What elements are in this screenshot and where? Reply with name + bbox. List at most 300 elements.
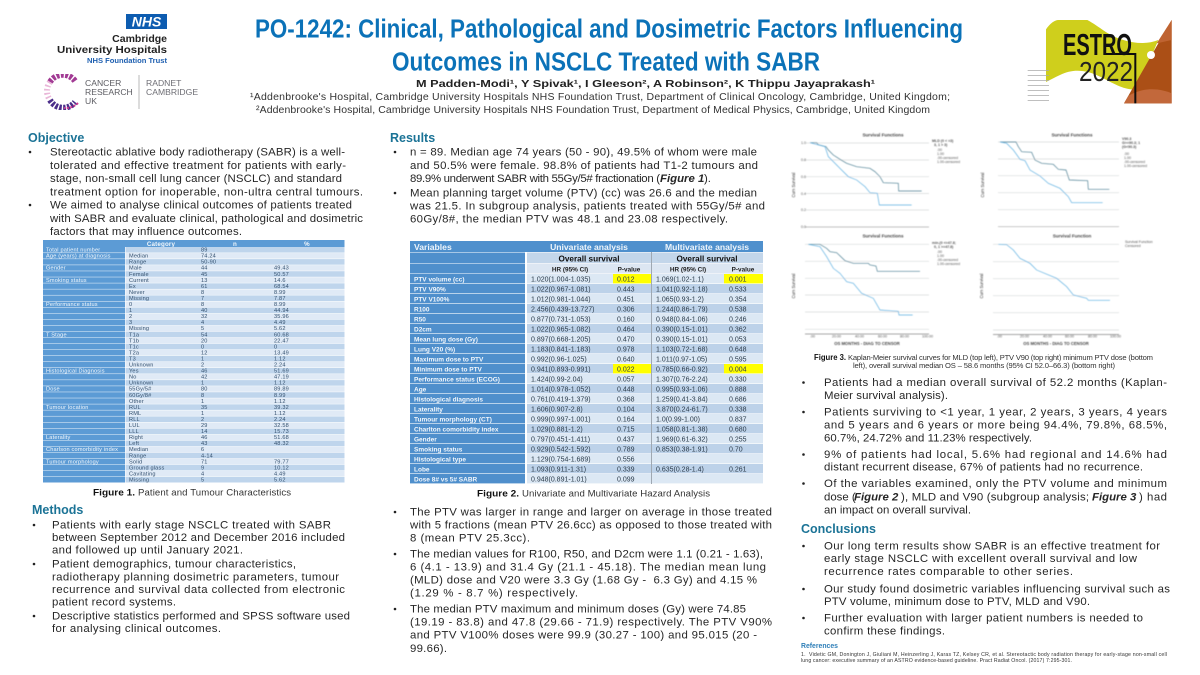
table: univariate and multivariate hazard analysis: 0.837: [729, 416, 747, 423]
chart: overall survival (bottom right): Censored: [1125, 244, 1141, 248]
chart: Kaplan-Meier MLD (top left): .00-censored: [937, 156, 958, 160]
text block: methods bullets: radiotherapy planning dosimetric parameters, tumour: [52, 572, 339, 584]
text block: survival findings bullets: Figure 3: [1092, 492, 1137, 504]
text block: conclusions bullets: early stage NSCLC with excellent overall survival and low: [824, 553, 1138, 565]
text block: survival findings bullets: an impact on overall survival.: [824, 504, 971, 516]
chart: Kaplan-Meier MLD (top left): 1.00: [937, 152, 944, 156]
chart: Kaplan-Meier MLD (top left): [791, 132, 960, 229]
table: patient and tumour characteristics: 7.87: [274, 296, 286, 302]
text block: objective bullets: treatment option for inoperable, non-ultra central tumours.: [50, 186, 363, 198]
table: patient and tumour characteristics: 43: [201, 441, 208, 447]
logo: ESTRO 2022: [1028, 20, 1172, 103]
text block: objective bullets: tolerated and effective treatment for patients with early-: [50, 160, 346, 172]
chart: overall survival (bottom right): 100.00: [1110, 334, 1121, 338]
caption: Figure 1: Figure 1.: [93, 488, 135, 498]
table: patient and tumour characteristics: Age (years) at diagnosis: [46, 254, 111, 260]
table: patient and tumour characteristics: Histological Diagnosis: [46, 369, 105, 375]
chart: overall survival (bottom right): 40.00: [1043, 334, 1052, 338]
table: univariate and multivariate hazard analysis: 0.362: [729, 326, 747, 333]
table: univariate and multivariate hazard analysis: 0.246: [729, 316, 747, 323]
text block: survival findings bullets: ) had: [1139, 492, 1167, 504]
table: patient and tumour characteristics: 54: [201, 332, 208, 338]
text block: results summary bullets: [394, 146, 765, 226]
table: patient and tumour characteristics: 6: [201, 447, 204, 453]
table: univariate and multivariate hazard analysis: 0.640: [617, 356, 635, 363]
chart: Kaplan-Meier minimum PTV dose (bottom left): .00: [810, 334, 815, 338]
table: univariate and multivariate hazard analysis: 3.870(0.24-61.7): [656, 406, 708, 413]
title: Outcomes in NSCLC Treated with SABR: [392, 48, 820, 76]
table: patient and tumour characteristics: Other: [129, 399, 144, 405]
table: univariate and multivariate hazard analysis: 1.011(0.97-1.05): [656, 356, 707, 363]
logo: ESTRO 2022: ESTRO: [1063, 27, 1132, 62]
table: univariate and multivariate hazard analysis: 1.424(0.99-2.04): [531, 376, 583, 383]
panel: conclusions: [801, 522, 1170, 638]
logo: Cancer Research UK RadNet Cambridge: CAMBRIDGE: [146, 87, 198, 97]
chart: Kaplan-Meier PTV V90 (top right): Cum Survival: [980, 172, 985, 197]
text block: objective bullets: Stereotactic ablative body radiotherapy (SABR) is a well-: [50, 146, 345, 158]
table: patient and tumour characteristics: Current: [129, 278, 149, 284]
caption: Figure 1: Patient and Tumour Characteristics: [138, 488, 291, 498]
references: [801, 643, 1167, 664]
chart: Kaplan-Meier PTV V90 (top right): 1.00-censored: [1124, 164, 1147, 168]
table: univariate and multivariate hazard analysis: Age: [414, 386, 427, 393]
chart: Kaplan-Meier minimum PTV dose (bottom left): .00-censored: [937, 258, 958, 262]
table: patient and tumour characteristics: Total patient number: [46, 248, 100, 254]
table: univariate and multivariate hazard analysis: Laterality: [414, 406, 443, 413]
table: patient and tumour characteristics: Charlson comorbidity index: [46, 447, 118, 453]
table: patient and tumour characteristics: 32: [201, 314, 208, 320]
table: univariate and multivariate hazard analysis: Overall survival: [676, 254, 738, 264]
table: univariate and multivariate hazard analysis: 0.160: [617, 316, 635, 323]
table: patient and tumour characteristics: 1: [201, 381, 204, 387]
table: univariate and multivariate hazard analysis: P-value: [618, 266, 641, 273]
table: univariate and multivariate hazard analysis: 1.012(0.981-1.044): [531, 296, 591, 303]
table: univariate and multivariate hazard analysis: Variables: [414, 242, 452, 252]
table: patient and tumour characteristics: 0: [201, 344, 204, 350]
chart: overall survival (bottom right): 60.00: [1065, 334, 1074, 338]
table: univariate and multivariate hazard analysis: 0.948(0.84-1.06): [656, 316, 708, 323]
table: univariate and multivariate hazard analysis: 1.041(0.92-1.18): [656, 286, 708, 293]
table: patient and tumour characteristics: 60Gy/8#: [129, 393, 152, 399]
chart: Kaplan-Meier PTV V90 (top right): [980, 132, 1147, 227]
chart: Kaplan-Meier PTV V90 (top right): V90.3: [1122, 137, 1131, 141]
chart: Kaplan-Meier PTV V90 (top right): Survival Functions: [1051, 132, 1093, 138]
table: patient and tumour characteristics: LLL: [129, 429, 139, 435]
table: patient and tumour characteristics: Missing: [129, 296, 149, 302]
table: univariate and multivariate hazard analysis: 0.533: [729, 286, 747, 293]
chart: Kaplan-Meier MLD (top left): 1.00-censored: [937, 160, 960, 164]
chart: Kaplan-Meier PTV V90 (top right): G>=90.3; 1: [1122, 141, 1140, 145]
table: univariate and multivariate hazard analysis: 1.244(0.86-1.79): [656, 306, 708, 313]
table: univariate and multivariate hazard analysis: 1.058(0.81-1.38): [656, 426, 708, 433]
table: patient and tumour characteristics: T1c: [129, 344, 139, 350]
text block: results detail bullets: with 5 fractions (mean PTV 26.6cc) as opposed to those treated with: [409, 520, 772, 532]
table: univariate and multivariate hazard analysis: 1.014(0.978-1.052): [531, 386, 591, 393]
text block: results detail bullets: (1.29 % - 8.7 %) respectively.: [410, 588, 578, 600]
logo: Cancer Research UK RadNet Cambridge: [47, 75, 198, 109]
table: univariate and multivariate hazard analysis: 1.969(0.61-6.32): [656, 436, 708, 443]
table: patient and tumour characteristics: 4.49: [274, 471, 286, 477]
chart: Kaplan-Meier minimum PTV dose (bottom left): 60.00: [878, 334, 887, 338]
table: patient and tumour characteristics: Never: [129, 290, 145, 296]
text block: methods bullets: recurrence and survival data collected from electronic: [52, 584, 345, 596]
table: univariate and multivariate hazard analysis: Tumour morphology (CT): [414, 416, 492, 423]
table: patient and tumour characteristics: 44: [201, 266, 208, 272]
table: patient and tumour characteristics: 61: [201, 284, 208, 290]
table: patient and tumour characteristics: T1b: [129, 338, 139, 344]
table: patient and tumour characteristics: 50-90: [201, 260, 216, 266]
table: univariate and multivariate hazard analysis: 0.330: [729, 376, 747, 383]
caption: Figure 2: Figure 2.: [477, 488, 519, 500]
table: univariate and multivariate hazard analysis: 0.929(0.542-1.592): [531, 446, 591, 453]
table: patient and tumour characteristics: RUL: [129, 405, 141, 411]
table: univariate and multivariate hazard analysis: R50: [414, 316, 426, 323]
table: patient and tumour characteristics: 8.99: [274, 302, 286, 308]
table: univariate and multivariate hazard analysis: 1.022(0.967-1.081): [531, 286, 591, 293]
table: univariate and multivariate hazard analysis: 0.897(0.668-1.205): [531, 336, 591, 343]
table: univariate and multivariate hazard analysis: 0.948(0.891-1.01): [531, 476, 587, 483]
table: patient and tumour characteristics: %: [304, 241, 310, 248]
chart: Kaplan-Meier PTV V90 (top right): 1.00: [1124, 156, 1131, 160]
table: patient and tumour characteristics: Performance status: [46, 302, 98, 308]
table: univariate and multivariate hazard analysis: 0.390(0.15-1.01): [656, 326, 708, 333]
table: univariate and multivariate hazard analysis: 0.099: [617, 476, 635, 483]
text block: results summary bullets: Figure 1: [660, 173, 704, 185]
table: patient and tumour characteristics: Unknown: [129, 381, 154, 387]
affiliations: [250, 91, 950, 116]
table: patient and tumour characteristics: 1.12: [274, 399, 286, 405]
table: patient and tumour characteristics: 50.57: [274, 272, 289, 278]
chart: Kaplan-Meier minimum PTV dose (bottom left): 40.00: [855, 334, 864, 338]
table: patient and tumour characteristics: [43, 240, 344, 484]
table: patient and tumour characteristics: n: [233, 241, 237, 248]
table: univariate and multivariate hazard analysis: 0.70: [729, 446, 743, 453]
table: patient and tumour characteristics: Unknown: [129, 363, 154, 369]
text block: results detail bullets: [394, 506, 772, 655]
table: univariate and multivariate hazard analysis: Charlton comorbidity index: [414, 426, 499, 433]
table: patient and tumour characteristics: Tumour morphology: [46, 459, 99, 465]
text block: objective bullets: We aimed to analyse clinical outcomes of patients treated: [50, 200, 352, 212]
table: univariate and multivariate hazard analysis: R100: [414, 306, 430, 313]
table: univariate and multivariate hazard analysis: 1.069(1.02-1.1): [656, 276, 704, 283]
table: univariate and multivariate hazard analysis: PTV volume (cc): [414, 276, 465, 283]
chart: Kaplan-Meier minimum PTV dose (bottom left): 1.00-censored: [937, 262, 960, 266]
table: patient and tumour characteristics: 4: [201, 320, 204, 326]
table: patient and tumour characteristics: Range: [129, 453, 146, 459]
table: univariate and multivariate hazard analysis: Gender: [414, 436, 437, 443]
table: univariate and multivariate hazard analysis: 0.443: [617, 286, 635, 293]
table: patient and tumour characteristics: 2.24: [274, 363, 286, 369]
text block: survival findings bullets: ), MLD and V90 (subgroup analysis;: [901, 492, 1089, 504]
chart: Kaplan-Meier MLD (top left): Survival Functions: [862, 132, 904, 138]
table: univariate and multivariate hazard analysis: 0.797(0.451-1.411): [531, 436, 590, 443]
table: patient and tumour characteristics: T1a: [129, 332, 140, 338]
logo: NHS Cambridge University Hospitals: Cambridge: [112, 33, 167, 45]
table: univariate and multivariate hazard analysis: 0.978: [617, 346, 635, 353]
table: univariate and multivariate hazard analysis: 0.595: [729, 356, 747, 363]
chart: overall survival (bottom right): .00: [997, 334, 1002, 338]
table: patient and tumour characteristics: Ex: [129, 284, 136, 290]
table: univariate and multivariate hazard analysis: Multivariate analysis: [665, 242, 749, 252]
table: patient and tumour characteristics: 89: [201, 248, 208, 254]
table: patient and tumour characteristics: Median: [129, 254, 148, 260]
table: univariate and multivariate hazard analysis: 0.368: [617, 396, 635, 403]
table: univariate and multivariate hazard analysis: Smoking status: [414, 446, 463, 453]
table: univariate and multivariate hazard analysis: 0.686: [729, 396, 747, 403]
chart: Kaplan-Meier minimum PTV dose (bottom left): [791, 234, 960, 346]
table: patient and tumour characteristics: 35: [201, 405, 208, 411]
table: patient and tumour characteristics: Right: [129, 435, 143, 441]
chart: Kaplan-Meier PTV V90 (top right): .00: [1124, 152, 1129, 156]
table: patient and tumour characteristics: 44.94: [274, 308, 289, 314]
table: patient and tumour characteristics: Range: [129, 260, 146, 266]
table: patient and tumour characteristics: 15.73: [274, 429, 289, 435]
text block: survival findings bullets: distant recurrent disease, 67% of patients had no recurrence.: [824, 462, 1143, 474]
text block: results detail bullets: (MLD) dose and V20 were 3.3 Gy (1.68 Gy - 6.3 Gy) and 4.15 %: [410, 574, 757, 586]
text block: methods bullets: Patient demographics, tumour characteristics,: [52, 558, 296, 570]
table: patient and tumour characteristics: 46: [201, 435, 208, 441]
table: patient and tumour characteristics: 5.62: [274, 477, 286, 483]
table: patient and tumour characteristics: No: [129, 375, 137, 381]
table: univariate and multivariate hazard analysis: 0.941(0.893-0.991): [531, 366, 591, 373]
table: patient and tumour characteristics: 7: [201, 296, 204, 302]
caption: Figure 2: Univariate and Multivariate Hazard Analysis: [522, 488, 710, 500]
table: univariate and multivariate hazard analysis: Histological diagnosis: [414, 396, 483, 403]
table: univariate and multivariate hazard analysis: 0.437: [617, 436, 635, 443]
table: patient and tumour characteristics: 1: [201, 356, 204, 362]
chart: overall survival (bottom right): 80.00: [1088, 334, 1097, 338]
panel: objective: [28, 131, 363, 238]
table: patient and tumour characteristics: 46: [201, 369, 208, 375]
chart: Kaplan-Meier MLD (top left): 0.0: [801, 225, 806, 229]
chart: overall survival (bottom right): Survival Function: [1053, 234, 1091, 238]
text block: objective bullets: [29, 146, 363, 238]
table: patient and tumour characteristics: 14.6: [274, 278, 286, 284]
logo: NHS Cambridge University Hospitals: University Hospitals: [57, 44, 167, 56]
title: PO-1242: Clinical, Pathological and Dosimetric Factors Influencing: [255, 16, 963, 44]
table: patient and tumour characteristics: 40: [201, 308, 208, 314]
table: univariate and multivariate hazard analysis: 0.448: [617, 386, 635, 393]
table: univariate and multivariate hazard analysis: 0.648: [729, 346, 747, 353]
chart: Kaplan-Meier minimum PTV dose (bottom left): 1.00: [937, 254, 944, 258]
text block: survival findings bullets: Patients surviving to <1 year, 1 year, 2 years, 3 years, 4 years: [824, 407, 1167, 419]
text block: conclusions bullets: recurrence rates comparable to other series.: [824, 566, 1073, 578]
table: univariate and multivariate hazard analysis: 0.053: [729, 336, 747, 343]
text block: methods bullets: and followed up until January 2021.: [52, 544, 243, 556]
table: patient and tumour characteristics: RLL: [129, 417, 140, 423]
caption: Figure 3: Figure 3.: [814, 353, 846, 362]
table: univariate and multivariate hazard analysis: 0.999(0.997-1.001): [531, 416, 591, 423]
logo: Cancer Research UK RadNet Cambridge: RESEARCH: [85, 87, 133, 97]
table: patient and tumour characteristics: Ground glass: [129, 465, 164, 471]
table: univariate and multivariate hazard analysis: 1.065(0.93-1.2): [656, 296, 704, 303]
affiliations: ¹Addenbrooke's Hospital, Cambridge University Hospitals NHS Foundation Trust, Department of Clinical Oncology, Cambridge, United Kingdom;: [250, 91, 950, 103]
table: patient and tumour characteristics: 29: [201, 423, 208, 429]
text block: survival findings bullets: Patients had a median overall survival of 52.2 months (Kaplan-: [824, 377, 1167, 389]
text block: survival findings bullets: and 5 years and 6 years or more being 94.4%, 79.8%, 68.5%,: [824, 420, 1167, 432]
table: univariate and multivariate hazard analysis: 1.022(0.965-1.082): [531, 326, 591, 333]
table: univariate and multivariate hazard analysis: 1.020(1.004-1.035): [531, 276, 591, 283]
table: univariate and multivariate hazard analysis: HR (95% CI): [670, 266, 706, 273]
table: univariate and multivariate hazard analysis: 0.853(0.38-1.91): [656, 446, 708, 453]
table: univariate and multivariate hazard analysis: 0.470: [617, 336, 635, 343]
table: patient and tumour characteristics: Category: [147, 241, 176, 248]
table: patient and tumour characteristics: 5: [201, 477, 204, 483]
table: patient and tumour characteristics: 35.96: [274, 314, 289, 320]
table: univariate and multivariate hazard analysis: 0.104: [617, 406, 635, 413]
table: univariate and multivariate hazard analysis: 0.464: [617, 326, 635, 333]
chart: Kaplan-Meier PTV V90 (top right): (G<90.3): [1122, 145, 1137, 149]
table: patient and tumour characteristics: 47.19: [274, 375, 289, 381]
chart: Kaplan-Meier minimum PTV dose (bottom left): 0, 1 >=47.8): [934, 245, 954, 249]
logo: Cancer Research UK RadNet Cambridge: UK: [85, 96, 97, 106]
table: patient and tumour characteristics: 42: [201, 375, 208, 381]
text block: results detail bullets: The median values for R100, R50, and D2cm were 1.1 (0.21 - 1.63),: [410, 548, 763, 560]
table: patient and tumour characteristics: Smoking status: [46, 278, 87, 284]
table: univariate and multivariate hazard analysis: 1.606(0.907-2.8): [531, 406, 583, 413]
table: patient and tumour characteristics: 10.12: [274, 465, 289, 471]
table: patient and tumour characteristics: Left: [129, 441, 139, 447]
table: univariate and multivariate hazard analysis: D2cm: [414, 326, 432, 333]
table: univariate and multivariate hazard analysis: 0.635(0.28-1.4): [656, 466, 704, 473]
text block: conclusions bullets: [802, 540, 1170, 638]
table: patient and tumour characteristics: 8.99: [274, 393, 286, 399]
heading: Conclusions: Conclusions: [801, 522, 876, 536]
text block: survival findings bullets: 9% of patients had local, 5.6% had regional and 14.6% had: [824, 449, 1167, 461]
logo: NHS Cambridge University Hospitals: NHS: [132, 14, 162, 30]
table: patient and tumour characteristics: 8: [201, 393, 204, 399]
table: patient and tumour characteristics: 5.62: [274, 326, 286, 332]
table: patient and tumour characteristics: 55Gy/5#: [129, 387, 152, 393]
table: patient and tumour characteristics: 79.77: [274, 459, 289, 465]
table: univariate and multivariate hazard analysis: Dose 8# vs 5# SABR: [414, 476, 478, 483]
table: univariate and multivariate hazard analysis: 0.057: [617, 376, 635, 383]
table: univariate and multivariate hazard analysis: P-value: [732, 266, 755, 273]
chart: Kaplan-Meier minimum PTV dose (bottom left): .00: [937, 250, 942, 254]
table: patient and tumour characteristics: 48.32: [274, 441, 289, 447]
text block: results detail bullets: 6 (4.1 - 13.9) and 31.4 Gy (21.1 - 45.18). The median mean lung: [410, 562, 766, 574]
heading: Methods: Methods: [32, 503, 83, 517]
chart: Kaplan-Meier minimum PTV dose (bottom left): min.(0 <=47.8;: [932, 241, 956, 245]
table: patient and tumour characteristics: 12: [201, 350, 208, 356]
table: patient and tumour characteristics: Laterality: [46, 435, 71, 441]
chart: Kaplan-Meier minimum PTV dose (bottom left): 100.00: [922, 334, 933, 338]
text block: results summary bullets: was 21.5. In subgroup analysis, patients treated with 55Gy/5# and: [409, 200, 765, 212]
chart: Kaplan-Meier minimum PTV dose (bottom left): 80.00: [900, 334, 909, 338]
table: patient and tumour characteristics: 14: [201, 429, 208, 435]
chart: overall survival (bottom right): 20.00: [1020, 334, 1029, 338]
table: patient and tumour characteristics: 8.99: [274, 290, 286, 296]
caption: Figure 3: [814, 353, 1153, 370]
table: univariate and multivariate hazard analysis: 0.785(0.66-0.92): [656, 366, 708, 373]
table: univariate and multivariate hazard analysis: [410, 241, 763, 484]
chart: Kaplan-Meier MLD (top left): 0.8: [801, 158, 806, 162]
table: patient and tumour characteristics: 13.49: [274, 350, 289, 356]
table: univariate and multivariate hazard analysis: Maximum dose to PTV: [414, 356, 484, 363]
text block: survival findings bullets: dose (: [824, 492, 856, 504]
table: patient and tumour characteristics: 32.58: [274, 423, 289, 429]
logo: NHS Cambridge University Hospitals: [57, 14, 168, 65]
text block: methods bullets: between September 2012 and December 2016 included: [52, 532, 345, 544]
table: patient and tumour characteristics: 80: [201, 387, 208, 393]
text block: results detail bullets: (19.19 - 83.8) and 47.8 (29.66 - 71.9) respectively. The PTV V90%: [410, 616, 772, 628]
table: patient and tumour characteristics: 13: [201, 278, 208, 284]
table: patient and tumour characteristics: 60.68: [274, 332, 289, 338]
text block: survival findings bullets: [802, 377, 1167, 516]
table: univariate and multivariate hazard analysis: 1.0(0.99-1.00): [656, 416, 700, 423]
caption: Figure 3: Kaplan-Meier survival curves for MLD (top left), PTV V90 (top right) minimum PTV dose (bottom: [848, 353, 1153, 362]
table: univariate and multivariate hazard analysis: 0.022: [617, 366, 635, 373]
table: univariate and multivariate hazard analysis: Overall survival: [558, 254, 620, 264]
table: univariate and multivariate hazard analysis: 0.680: [729, 426, 747, 433]
table: patient and tumour characteristics: 20: [201, 338, 208, 344]
table: patient and tumour characteristics: 1.12: [274, 411, 286, 417]
table: patient and tumour characteristics: 4.49: [274, 320, 286, 326]
chart: overall survival (bottom right): Cum Survival: [979, 273, 984, 298]
table: univariate and multivariate hazard analysis: 1.029(0.881-1.2): [531, 426, 583, 433]
table: patient and tumour characteristics: 0: [129, 302, 132, 308]
panel: results: [390, 131, 765, 226]
table: patient and tumour characteristics: 2: [201, 417, 204, 423]
table: univariate and multivariate hazard analysis: 0.451: [617, 296, 635, 303]
chart: Kaplan-Meier minimum PTV dose (bottom left): Cum Survival: [791, 273, 796, 298]
table: patient and tumour characteristics: 49.43: [274, 266, 289, 272]
table: patient and tumour characteristics: 8: [201, 302, 204, 308]
affiliations: ²Addenbrooke's Hospital, Cambridge University Hospitals NHS Foundation Trust, Department of Medical Physics, Cambridge, United Kingdom: [256, 104, 930, 116]
text block: results detail bullets: 8 (mean PTV 25.3cc).: [410, 532, 530, 544]
text block: survival findings bullets: Figure 2: [854, 492, 899, 504]
table: patient and tumour characteristics: Gender: [46, 266, 66, 272]
text block: results detail bullets: and PTV V100% doses were 99.9 (30.27 - 100) and 95.015 (20 -: [410, 630, 757, 642]
table: univariate and multivariate hazard analysis: PTV V100%: [414, 296, 450, 303]
table: univariate and multivariate hazard analysis: 0.255: [729, 436, 747, 443]
table: univariate and multivariate hazard analysis: 0.338: [729, 406, 747, 413]
table: univariate and multivariate hazard analysis: Lobe: [414, 466, 430, 473]
text block: methods bullets: Patients with early stage NSCLC treated with SABR: [52, 520, 331, 532]
references: References: [801, 643, 838, 650]
table: patient and tumour characteristics: T3: [129, 356, 136, 362]
table: patient and tumour characteristics: 4-14: [201, 453, 213, 459]
table: patient and tumour characteristics: 71: [201, 459, 208, 465]
table: univariate and multivariate hazard analysis: 1.093(0.911-1.31): [531, 466, 586, 473]
table: univariate and multivariate hazard analysis: Lung V20 (%): [414, 346, 455, 353]
text block: conclusions bullets: Our study found dosimetric variables influencing survival such as: [824, 584, 1170, 596]
table: univariate and multivariate hazard analysis: 0.390(0.15-1.01): [656, 336, 708, 343]
references: lung cancer: executive summary of an ASTRO evidence-based guideline. Pract Radiat Oncol. (2017) 7:295-301.: [801, 658, 1072, 664]
text block: results summary bullets: 89.9% underwent SABR with 55Gy/5# fractionation (: [410, 173, 660, 185]
table: patient and tumour characteristics: 9: [201, 465, 204, 471]
text block: methods bullets: patient record systems.: [52, 596, 176, 608]
table: patient and tumour characteristics: Yes: [129, 369, 139, 375]
text block: conclusions bullets: confirm these findings.: [824, 626, 945, 638]
table: univariate and multivariate hazard analysis: 0.995(0.93-1.06): [656, 386, 708, 393]
table: patient and tumour characteristics: Missing: [129, 326, 149, 332]
text block: methods bullets: for analysing clinical outcomes.: [52, 623, 221, 635]
table: patient and tumour characteristics: 1.12: [274, 356, 286, 362]
text block: conclusions bullets: PTV volume, minimum dose to PTV, MLD and V90.: [824, 596, 1090, 608]
table: patient and tumour characteristics: 1: [201, 399, 204, 405]
chart: Kaplan-Meier MLD (top left): 0.2: [801, 208, 806, 212]
table: univariate and multivariate hazard analysis: Performance status (ECOG): [414, 376, 500, 383]
table: univariate and multivariate hazard analysis: 0.789: [617, 446, 635, 453]
logo: Cancer Research UK RadNet Cambridge: CANCER: [85, 78, 121, 88]
table: univariate and multivariate hazard analysis: 2.456(0.439-13.727): [531, 306, 594, 313]
text block: conclusions bullets: Further evaluation with larger patient numbers is needed to: [824, 612, 1143, 624]
table: patient and tumour characteristics: Median: [129, 447, 148, 453]
table: patient and tumour characteristics: T2a: [129, 350, 140, 356]
table: patient and tumour characteristics: T Stage: [46, 332, 67, 338]
table: patient and tumour characteristics: 74.24: [201, 254, 216, 260]
